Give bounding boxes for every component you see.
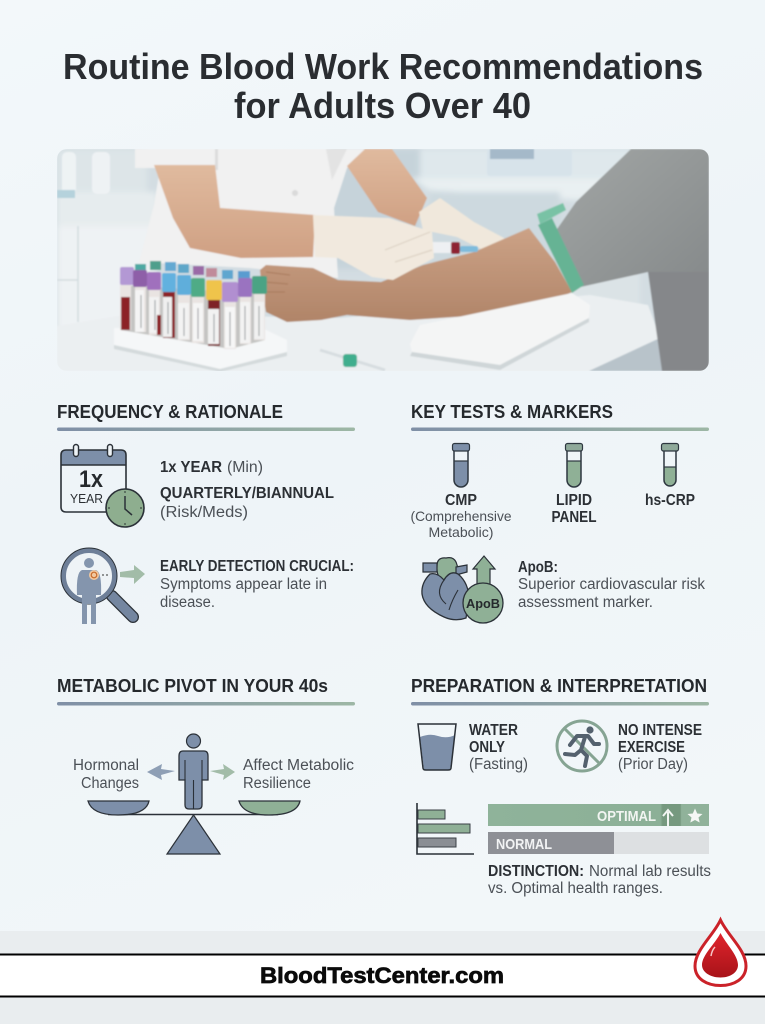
label: CMP: Metabolic): [428, 524, 494, 540]
text: ApoB: Superior cardiovascular risk: [518, 576, 705, 593]
tube gaps: [121, 285, 265, 349]
icon: magnifier over a body: [61, 548, 133, 624]
text: metabolic resilience: Affect Metabolic: [243, 757, 354, 774]
nurse far arm: [347, 149, 427, 226]
arrow: left: [147, 764, 175, 780]
title: [63, 46, 703, 126]
icon: small bar chart: [417, 803, 474, 854]
icon: hs-CRP tube: [662, 444, 678, 486]
text: early detection: [160, 558, 354, 611]
text: ApoB: assessment marker.: [518, 594, 653, 611]
photo: nurse drawing blood from a patient's arm, with a rack of tubes: [57, 149, 709, 372]
text: test frequency: 1x YEAR: [160, 459, 222, 476]
table top: [57, 295, 660, 371]
label: lipid panel: PANEL: [552, 509, 596, 526]
icon: blood drop logo: [695, 920, 746, 986]
text: distinction: [488, 863, 711, 897]
back row caps: [135, 261, 250, 280]
icon: person: [179, 734, 208, 809]
footer website name: BloodTestCenter.com: [260, 963, 504, 988]
text: water only: WATER: [469, 722, 518, 739]
panel: frequency and rationale: [57, 401, 355, 624]
text: no intense exercise: EXERCISE: [618, 739, 685, 756]
text: hormonal changes: [73, 757, 139, 792]
footer band: [0, 931, 765, 1024]
arrow: detection: [120, 565, 145, 584]
text: test frequency: QUARTERLY/BIANNUAL: [160, 485, 334, 502]
near glove: [313, 215, 434, 280]
label: lipid panel: LIPID: [556, 492, 592, 509]
bar: optimal: OPTIMAL: [597, 808, 656, 825]
text: water only: (Fasting): [469, 756, 528, 773]
patient arm: [260, 228, 572, 322]
panel: metabolic pivot: [57, 675, 355, 854]
heading: key tests: KEY TESTS & MARKERS: [411, 401, 613, 422]
panel: preparation and interpretation: [411, 675, 711, 897]
text: test frequency: [160, 459, 334, 521]
icon: calendar and clock: [61, 444, 144, 527]
text: water only: [469, 722, 528, 773]
icon: CMP tube: [452, 444, 470, 487]
icon: calendar and clock: YEAR: [70, 491, 103, 506]
text: water only: ONLY: [469, 739, 506, 756]
bar: normal: [488, 832, 709, 854]
icon: calendar and clock: 1x: [79, 466, 104, 493]
bar: normal: NORMAL: [496, 836, 552, 853]
icon: heart with ApoB marker: ApoB: [466, 596, 500, 611]
heading: frequency: FREQUENCY & RATIONALE: [57, 401, 283, 422]
text: metabolic resilience: [243, 757, 354, 792]
text: distinction: DISTINCTION:: [488, 863, 584, 880]
text: ApoB: ApoB:: [518, 559, 558, 576]
heading: metabolic pivot: METABOLIC PIVOT IN YOUR 40s: [57, 675, 328, 696]
far glove: [419, 198, 506, 252]
text: distinction: Normal lab results: [589, 863, 711, 880]
arrow: right: [210, 764, 235, 780]
green tourniquet: [538, 218, 584, 293]
text: ApoB: [518, 559, 705, 611]
label: CMP: (Comprehensive: [410, 508, 512, 524]
grey sleeve and torso: [648, 262, 709, 371]
label: CMP: [410, 492, 512, 540]
icon: no exercise: [557, 721, 607, 771]
text: early detection: disease.: [160, 594, 215, 611]
title: Routine Blood Work Recommendations: [63, 46, 703, 87]
text: early detection: Symptoms appear late in: [160, 576, 327, 593]
heading: preparation: PREPARATION & INTERPRETATION: [411, 675, 707, 696]
label lines: [141, 295, 259, 346]
nurse near arm: [154, 165, 315, 258]
icon: heart with ApoB marker: [422, 556, 503, 623]
label: lipid panel: [552, 492, 596, 526]
title: for Adults Over 40: [234, 85, 531, 126]
text: no intense exercise: [618, 722, 702, 773]
label: hs-CRP: hs-CRP: [645, 492, 695, 509]
tube rack: [114, 328, 287, 369]
text: early detection: EARLY DETECTION CRUCIAL:: [160, 558, 354, 575]
text: metabolic resilience: Resilience: [243, 775, 311, 792]
icon: glass of water: [418, 724, 456, 770]
text: hormonal changes: Changes: [81, 775, 139, 792]
text: test frequency: (Min): [227, 459, 263, 476]
bar: optimal: [488, 804, 709, 826]
pillow: [410, 293, 590, 365]
icon: lipid tube: [566, 444, 582, 487]
text: test frequency: (Risk/Meds): [160, 504, 248, 521]
spare needle on table: [320, 350, 385, 370]
text: no intense exercise: NO INTENSE: [618, 722, 702, 739]
text: no intense exercise: (Prior Day): [618, 756, 688, 773]
syringe: [432, 242, 452, 254]
text: hormonal changes: Hormonal: [73, 757, 139, 774]
text: distinction: vs. Optimal health ranges.: [488, 880, 663, 897]
front row tubes: [120, 267, 267, 349]
tunic: [135, 149, 372, 278]
panel: key tests and markers: [410, 401, 709, 623]
icon: balance scale: [88, 801, 300, 854]
label: CMP: CMP: [445, 492, 477, 509]
